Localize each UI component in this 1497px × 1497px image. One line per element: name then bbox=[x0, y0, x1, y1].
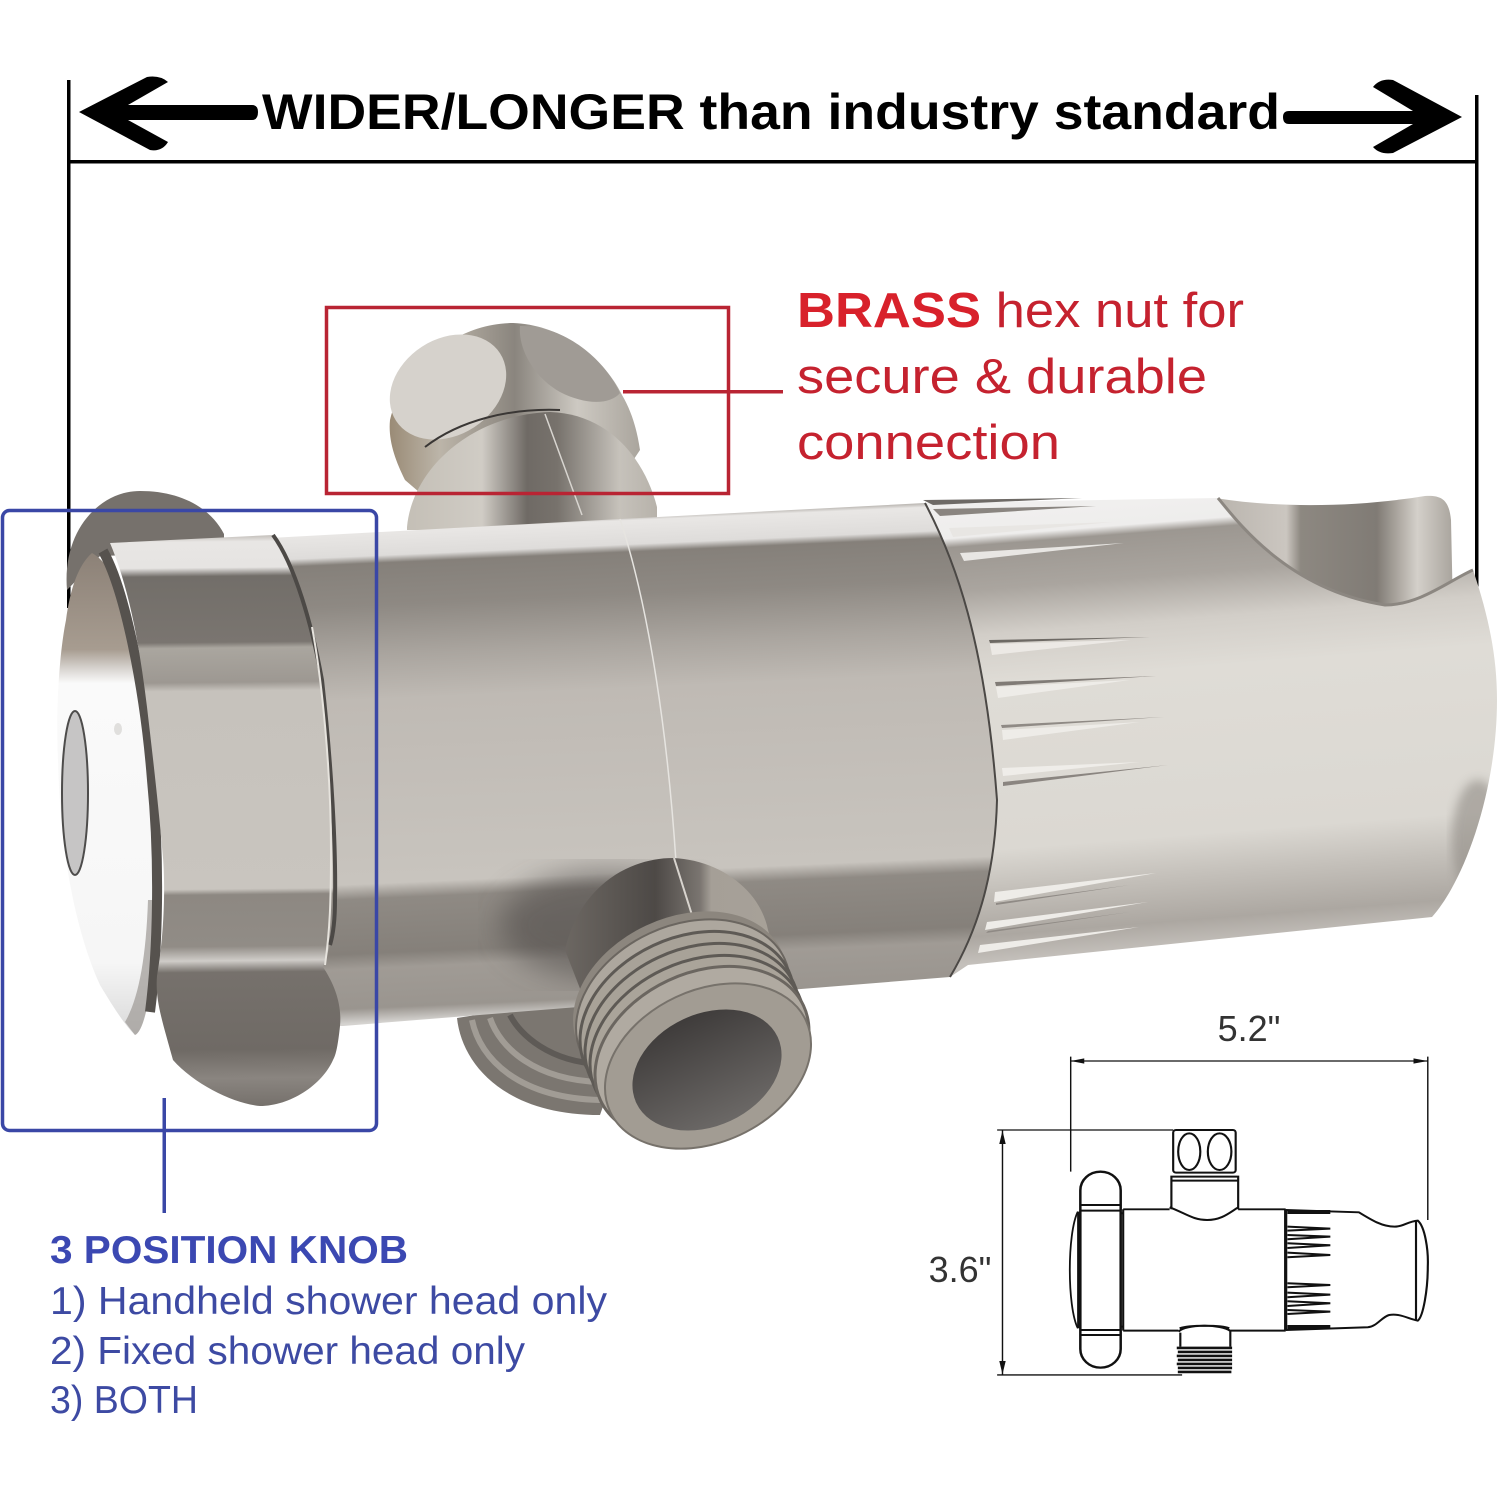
knob positions text: 3 POSITION KNOB bbox=[50, 1229, 408, 1272]
product photo: shower diverter bbox=[57, 313, 1497, 1181]
lower rear thread bbox=[457, 1000, 640, 1115]
hex nut bbox=[370, 313, 657, 530]
shadow around outlet bbox=[500, 870, 720, 980]
left arrow bbox=[79, 77, 258, 150]
right arrow bbox=[1283, 80, 1462, 153]
height label: 3.6" bbox=[929, 1249, 991, 1290]
width label: 5.2" bbox=[1218, 1008, 1280, 1049]
blue leader line bbox=[162, 1098, 166, 1213]
knob positions text: 1) Handheld shower head only bbox=[50, 1280, 608, 1323]
knob ring bbox=[103, 551, 157, 1012]
rear knob tab bbox=[67, 491, 224, 590]
cap pin hole bbox=[114, 723, 122, 735]
callout: brass hex nut bbox=[797, 284, 1244, 470]
hand-shower cradle bbox=[1215, 496, 1453, 612]
grip ribs bbox=[923, 498, 1168, 953]
knob edge bbox=[273, 535, 335, 945]
knob positions text bbox=[50, 1229, 608, 1422]
callout: brass hex nut: BRASS hex nut for bbox=[797, 284, 1244, 338]
callout: brass hex nut: connection bbox=[797, 416, 1060, 470]
technical line drawing bbox=[997, 1057, 1428, 1375]
blue callout box bbox=[2, 510, 376, 1130]
dimension bracket: full width bbox=[67, 80, 1478, 608]
red leader line bbox=[623, 390, 783, 394]
red callout box bbox=[326, 308, 728, 494]
knob positions text: 3) BOTH bbox=[50, 1379, 198, 1422]
3 position knob bbox=[110, 535, 340, 1106]
barrel seam bbox=[620, 519, 676, 862]
body barrel bbox=[270, 503, 997, 1026]
callout: brass hex nut: secure & durable bbox=[797, 350, 1207, 404]
cap shadow bbox=[125, 900, 157, 1035]
knob edge highlight bbox=[312, 627, 331, 965]
threaded outlet bbox=[545, 858, 838, 1181]
nozzle end cap bbox=[57, 553, 158, 1035]
title: WIDER/LONGER than industry standard bbox=[262, 84, 1280, 140]
aerator mesh bbox=[62, 711, 88, 875]
grip section bbox=[923, 498, 1497, 977]
knob positions text: 2) Fixed shower head only bbox=[50, 1330, 526, 1373]
